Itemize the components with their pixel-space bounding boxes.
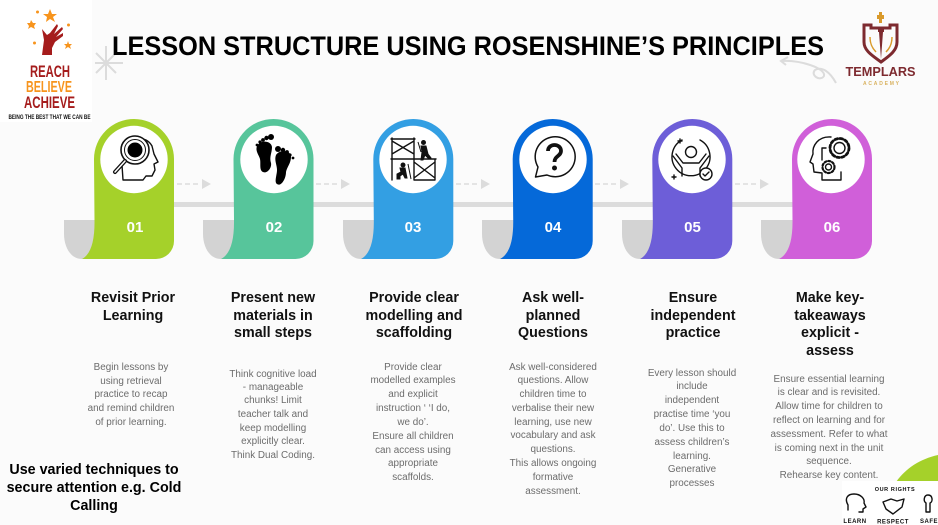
step 05 text: independent — [665, 395, 719, 406]
title: LESSON STRUCTURE USING ROSENSHINE’S PRINCIPLES — [112, 31, 824, 61]
logo: Templars Academy — [846, 12, 916, 87]
arrow 4 to 5 — [595, 179, 629, 189]
timeline bar — [174, 202, 794, 207]
decorative arrow swirl — [781, 57, 836, 83]
step 02 text: materials in — [233, 308, 313, 324]
step 05 text: processes — [669, 478, 715, 489]
step 02 text — [229, 290, 317, 461]
step 03 text: Provide clear — [369, 290, 459, 306]
callout: attention techniques: secure attention e.g. Cold — [7, 480, 181, 496]
icon: respect handshake — [883, 499, 904, 514]
step 05 text: Ensure — [669, 290, 717, 306]
step 01 text: Learning — [103, 308, 163, 324]
step 06 pill: 06 — [824, 219, 840, 236]
icon: person with raised arms and check — [672, 139, 712, 180]
logo: Templars Academy: TEMPLARS — [846, 65, 916, 79]
step 03 pill — [343, 119, 453, 259]
step 04 text: Ask well-considered — [509, 362, 597, 373]
logo: Reach Believe Achieve: BELIEVE — [26, 79, 72, 96]
icon: safe figures — [924, 495, 932, 512]
step 05 text: practise time ‘you — [654, 409, 730, 420]
icon: question speech bubble — [535, 137, 575, 177]
decorative star — [95, 46, 123, 80]
step 05 pill — [622, 119, 732, 259]
step 03 text: Provide clear — [384, 362, 443, 373]
step 04 text: assessment. — [525, 486, 581, 497]
step 03 text: modelling and — [366, 308, 462, 324]
step 03 text: can access using — [375, 445, 451, 456]
logo: Templars Academy: ACADEMY — [863, 81, 900, 87]
step 03 pill: 03 — [405, 219, 421, 236]
step 03 text: appropriate — [388, 458, 438, 469]
step 06 text: assessment. Refer to what — [771, 429, 888, 440]
step 02 text: chunks! Limit — [244, 395, 302, 406]
arrow 2 to 3 — [316, 179, 350, 189]
step 05 text: include — [676, 381, 708, 392]
step 06 text: reflect on learning and for — [773, 415, 886, 426]
step 06 text: Allow time for children to — [775, 401, 883, 412]
logo: Reach Believe Achieve: ACHIEVE — [24, 93, 75, 112]
icon: learn head — [846, 494, 866, 512]
step 06 text — [771, 290, 888, 481]
step 05 text: Generative — [668, 464, 717, 475]
icon: head with gears — [810, 137, 849, 180]
step 06 text: takeaways — [794, 308, 866, 324]
step 02 text: - manageable — [243, 382, 304, 393]
arrow 3 to 4 — [456, 179, 490, 189]
step 03 text: scaffolds. — [392, 472, 434, 483]
step 04 text: formative — [533, 472, 574, 483]
step 06 pill — [761, 119, 872, 259]
green corner shape — [896, 455, 938, 482]
step 03 text: and explicit — [388, 389, 438, 400]
step 01 text — [88, 290, 176, 428]
step 03 text: scaffolding — [376, 325, 452, 341]
step 04 text: Questions — [518, 325, 588, 341]
step 01 text: Revisit Prior — [91, 290, 176, 306]
step 04 text: questions. Allow — [518, 375, 589, 386]
step 05 text: Every lesson should — [648, 368, 736, 379]
step 04 pill — [482, 119, 593, 259]
step 06 text: explicit - — [801, 325, 859, 341]
step 05 text: assess children’s — [654, 437, 730, 448]
logo: Reach Believe Achieve: BEING THE BEST THAT WE CAN BE — [8, 114, 91, 121]
step 05 text: learning. — [673, 451, 711, 462]
step 04 text: children time to — [520, 389, 587, 400]
logo: Reach Believe Achieve — [0, 0, 92, 122]
step 06 text: assess — [806, 343, 854, 359]
step 02 text: keep modelling — [240, 423, 306, 434]
our rights panel — [842, 481, 938, 525]
icon: scaffolding and workers — [391, 138, 436, 180]
step 04 text: verbalise their new — [512, 403, 595, 414]
step 03 text: modelled examples — [370, 375, 456, 386]
step 05 pill: 05 — [684, 219, 701, 236]
step 04 text: vocabulary and ask — [510, 430, 596, 441]
step 06 text: sequence. — [806, 456, 852, 467]
step 01 pill — [64, 119, 174, 259]
step 02 text: explicitly clear. — [241, 436, 305, 447]
step 05 text: do’. Use this to — [659, 423, 725, 434]
our rights panel: LEARN — [843, 519, 867, 525]
step 01 pill: 01 — [127, 219, 143, 236]
step 06 text: Rehearse key content. — [780, 470, 878, 481]
step 01 text: practice to recap — [94, 389, 168, 400]
step 05 text: independent — [650, 308, 736, 324]
callout: attention techniques — [7, 462, 181, 514]
step 04 pill: 04 — [545, 219, 562, 236]
step 04 text: learning, use new — [514, 417, 593, 428]
arrow 1 to 2 — [177, 179, 211, 189]
our rights panel: SAFE — [920, 519, 938, 525]
callout: attention techniques: Calling — [70, 498, 118, 514]
step 03 text — [366, 290, 462, 483]
step 06 text: Ensure essential learning — [774, 374, 884, 385]
step 02 text: Think Dual Coding. — [231, 450, 315, 461]
step 01 text: Begin lessons by — [94, 362, 168, 373]
step 01 text: of prior learning. — [95, 417, 167, 428]
step 04 text: questions. — [530, 444, 576, 455]
icon: head with magnifying glass — [115, 136, 158, 180]
step 03 text: Ensure all children — [372, 431, 454, 442]
step 03 text: instruction ‘ ‘I do, — [376, 403, 450, 414]
step 05 text — [648, 290, 736, 489]
step 04 text: Ask well- — [522, 290, 584, 306]
step 02 text: small steps — [234, 325, 312, 341]
step 02 text: teacher talk and — [238, 409, 308, 420]
logo: Reach Believe Achieve: REACH — [30, 62, 70, 81]
step 02 text: Present new — [231, 290, 316, 306]
step 03 text: we do’. — [396, 417, 429, 428]
step 02 pill: 02 — [266, 219, 282, 236]
step 06 text: is coming next in the unit — [775, 443, 884, 454]
step 01 text: and remind children — [88, 403, 174, 414]
step 05 text: practice — [666, 325, 720, 341]
arrow 5 to 6 — [735, 179, 769, 189]
callout: attention techniques: Use varied techniques to — [9, 462, 179, 478]
step 04 text: This allows ongoing — [510, 458, 596, 469]
step 01 text: using retrieval — [100, 376, 162, 387]
our rights panel: OUR RIGHTS — [875, 487, 915, 493]
icon: footprints — [256, 134, 294, 185]
step 02 pill — [203, 119, 314, 259]
step 06 text: is clear and is revisited. — [778, 387, 880, 398]
step 04 text: planned — [526, 308, 580, 324]
step 06 text: Make key- — [796, 290, 864, 306]
step 02 text: Think cognitive load — [229, 369, 317, 380]
step 04 text — [509, 290, 597, 497]
